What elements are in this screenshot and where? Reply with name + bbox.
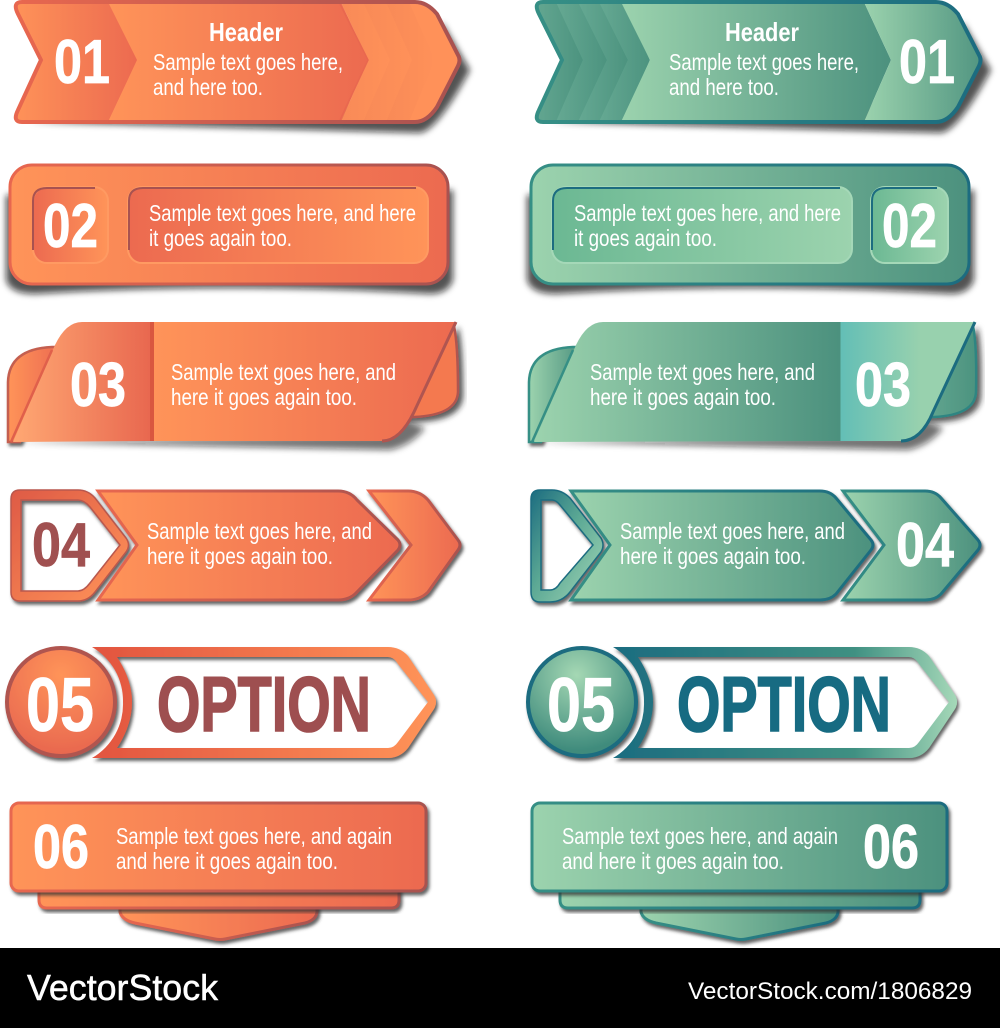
main panel — [11, 803, 426, 891]
body text — [620, 518, 845, 569]
main arrow — [571, 491, 873, 600]
text well — [552, 187, 852, 263]
number 01: 01 — [899, 28, 955, 97]
ribbon shadow — [532, 420, 943, 450]
banner 02 green — [527, 165, 974, 294]
body text: Sample text goes here, and — [620, 518, 845, 544]
banner 03 orange — [8, 322, 458, 450]
body text: Sample text goes here, and again — [562, 823, 838, 849]
footer url: VectorStock.com/1806829 — [688, 978, 972, 1005]
body text — [153, 49, 343, 100]
body text: and here too. — [153, 74, 263, 100]
body text: Sample text goes here, and again — [116, 823, 392, 849]
number 02: 02 — [43, 192, 98, 261]
outline tab — [531, 490, 603, 602]
body text — [562, 823, 838, 874]
banner 05 orange — [7, 647, 436, 758]
body text — [171, 359, 396, 410]
banner 04 green — [531, 490, 980, 602]
banner 01 orange inner sections — [18, 4, 458, 120]
outline tab — [11, 490, 128, 601]
number section — [13, 322, 152, 442]
number badge — [7, 648, 115, 756]
number well — [871, 187, 948, 263]
outer panel — [10, 165, 448, 284]
number section — [839, 322, 975, 441]
banner 03 green — [529, 322, 976, 450]
body text: Sample text goes here, — [153, 49, 343, 75]
number 03: 03 — [855, 351, 911, 420]
header: Header — [725, 17, 799, 47]
number 04: 04 — [32, 511, 90, 580]
number 03: 03 — [70, 351, 126, 420]
pointer — [641, 905, 838, 940]
body text — [590, 359, 815, 410]
body text — [574, 200, 841, 251]
arrow frame — [613, 647, 957, 758]
number 01: 01 — [54, 28, 110, 97]
banner 01 green outline — [537, 2, 980, 122]
banner 02 orange — [6, 165, 453, 294]
body text: Sample text goes here, and here — [149, 200, 416, 226]
header: Header — [209, 17, 283, 47]
banner 01 green inner sections — [538, 4, 978, 120]
left flap — [529, 347, 583, 442]
body text: and here too. — [669, 74, 779, 100]
body text — [669, 49, 859, 100]
number 06: 06 — [863, 813, 919, 882]
body text: here it goes again too. — [620, 543, 806, 569]
ribbon shadow — [12, 420, 425, 450]
option label: OPTION — [157, 660, 371, 748]
arrow frame — [92, 647, 436, 758]
banner 01 green shadow — [551, 22, 991, 133]
left flap — [8, 347, 62, 442]
body text: it goes again too. — [574, 225, 717, 251]
body text: Sample text goes here, and — [171, 359, 396, 385]
banner 01 orange — [10, 0, 470, 133]
body text — [147, 518, 372, 569]
banner 05 green — [528, 647, 957, 758]
main section — [152, 322, 456, 441]
text well — [128, 187, 428, 263]
panel shadow — [6, 190, 453, 294]
under band — [560, 888, 920, 908]
panel shadow — [527, 190, 974, 294]
left chevron stripes — [538, 4, 650, 120]
body text: Sample text goes here, and — [590, 359, 815, 385]
banner 01 orange shadow — [30, 22, 470, 133]
number 04: 04 — [896, 511, 954, 580]
number 05: 05 — [26, 663, 94, 748]
body text: here it goes again too. — [590, 384, 776, 410]
option label: OPTION — [677, 660, 891, 748]
body text: Sample text goes here, — [669, 49, 859, 75]
number tab — [864, 4, 978, 120]
number 05: 05 — [547, 663, 615, 748]
body text: here it goes again too. — [147, 543, 333, 569]
body text: Sample text goes here, and — [147, 518, 372, 544]
body text: and here it goes again too. — [562, 848, 784, 874]
main panel — [532, 803, 947, 891]
footer logo: VectorStock — [27, 967, 219, 1008]
body text — [116, 823, 392, 874]
under band — [39, 888, 399, 908]
body text — [149, 200, 416, 251]
banner 06 green — [532, 803, 947, 940]
banner 01 orange outline — [16, 2, 460, 122]
main section — [620, 0, 891, 124]
main section — [107, 0, 368, 124]
body text: and here it goes again too. — [116, 848, 338, 874]
banner 04 orange — [11, 490, 460, 601]
small arrow — [369, 491, 460, 600]
pointer — [120, 905, 317, 940]
footer bar — [0, 948, 1000, 1028]
banner 01 green — [530, 0, 991, 133]
body text: here it goes again too. — [171, 384, 357, 410]
number badge — [528, 648, 636, 756]
number 02: 02 — [882, 192, 937, 261]
main section — [534, 322, 839, 442]
body text: it goes again too. — [149, 225, 292, 251]
right flap — [398, 326, 458, 417]
number 06: 06 — [33, 813, 89, 882]
banner 06 orange — [11, 803, 426, 940]
main arrow — [98, 491, 400, 600]
body text: Sample text goes here, and here — [574, 200, 841, 226]
right chevron stripes — [342, 4, 458, 120]
right flap — [918, 326, 976, 417]
outer panel — [531, 165, 969, 284]
number tab — [18, 4, 137, 120]
number well — [33, 187, 108, 263]
small arrow — [843, 491, 980, 600]
